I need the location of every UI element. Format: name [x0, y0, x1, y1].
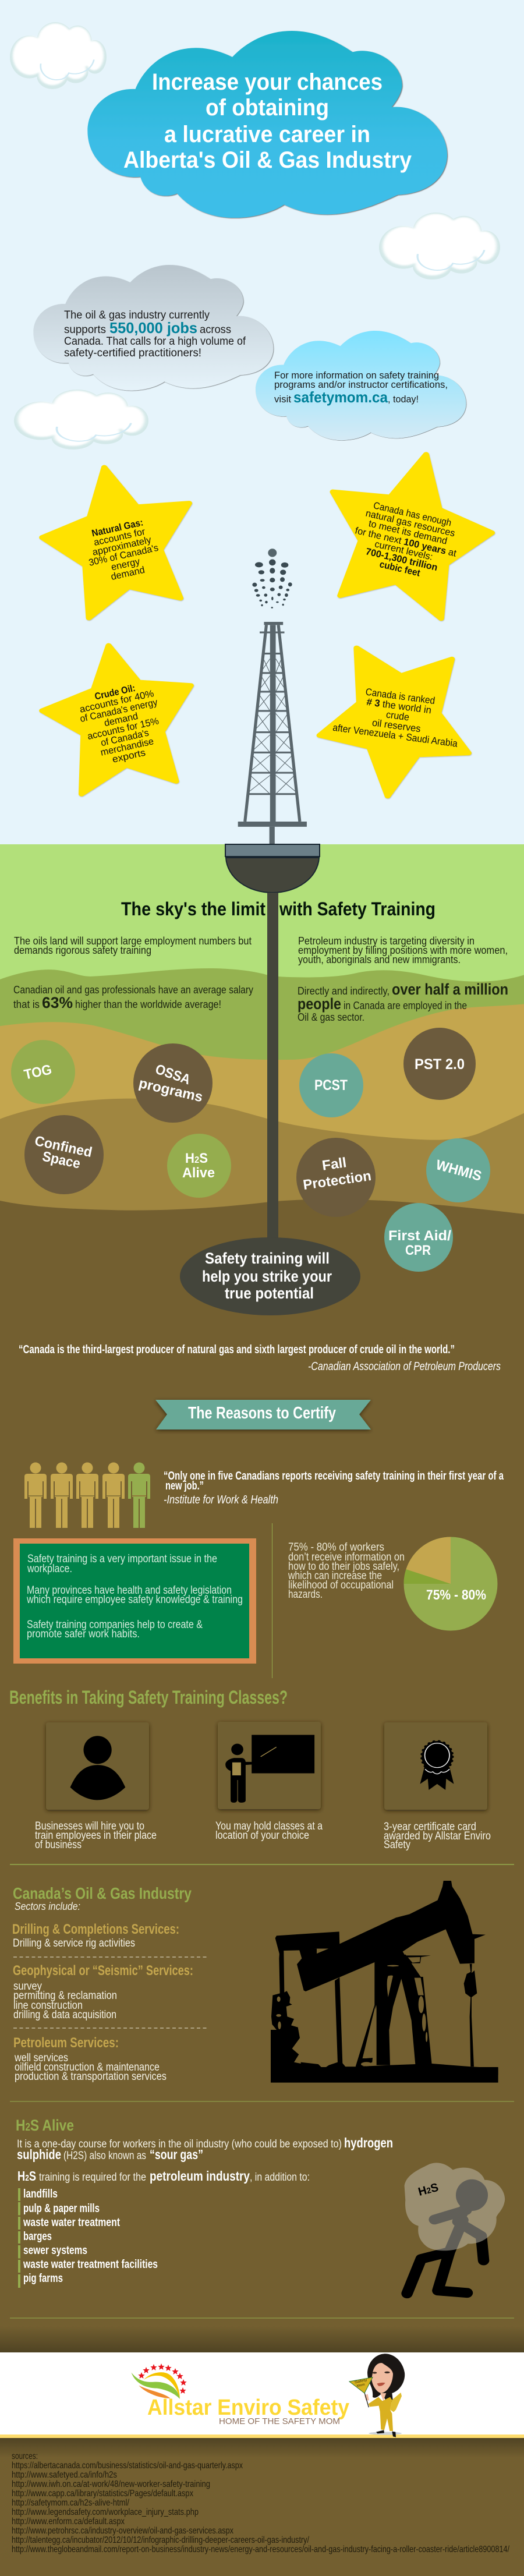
more information text: programs and/or instructor certifications, [274, 379, 448, 390]
natural gas text [82, 515, 164, 586]
badge: PST 2.0 [403, 1028, 476, 1100]
pie chart: 75-80 percent [403, 1537, 497, 1630]
sector: geophysical: permitting & reclamation [13, 1990, 117, 2002]
ground layers [0, 844, 524, 1311]
natural gas text: 30% of Canada's [88, 543, 160, 568]
text: employment numbers: demands rigorous safety training [14, 944, 151, 956]
heading: Canada's Oil & Gas Industry: Canada’s Oil & Gas Industry [13, 1884, 192, 1902]
badge: Confined Space [24, 1115, 104, 1194]
text: 63% salary: Canadian oil and gas professionals have an average salary [13, 984, 253, 996]
blue cloud: safetymom.ca [256, 331, 466, 440]
text: diversity: Petroleum industry is targeting diversity in [298, 935, 475, 947]
benefit text: location: You may hold classes at a [215, 1820, 323, 1832]
benefit text: hire you: train employees in their place [35, 1830, 157, 1842]
quote: one in five: -Institute for Work & Health [164, 1494, 278, 1506]
text: 63% salary: higher than the worldwide average! [75, 999, 221, 1010]
ranked text: crude [385, 709, 410, 723]
quote: Canadian Association of Petroleum Producers [19, 1343, 501, 1373]
pie chart: 75-80 percent: 75% - 80% [426, 1587, 486, 1603]
benefit text: hire you [35, 1820, 157, 1851]
100 years text [348, 497, 464, 586]
text: 75-80 percent of workers: likelihood of occupational [288, 1579, 394, 1591]
pictogram: one in five people [24, 1463, 150, 1528]
benefit text: certificate: awarded by Allstar Enviro [384, 1830, 491, 1842]
sources list: sources: [12, 2451, 38, 2461]
icon: award ribbon [420, 1741, 454, 1790]
badge: First Aid / CPR: CPR [405, 1243, 431, 1258]
quote: one in five [164, 1470, 504, 1506]
jobs text: supports [64, 324, 106, 336]
benefit card: hold classes [218, 1722, 321, 1809]
logo banner: Mom [356, 2383, 365, 2388]
sources list: http://talentegg.ca/incubator/2012/10/12/infographic-drilling-deeper-careers-oil-gas-industry/ [12, 2535, 309, 2545]
text: half a million people: Directly and indirectly, [298, 985, 390, 997]
list: H2S training industries [18, 2188, 158, 2288]
badge: First Aid / CPR: First Aid/ [388, 1228, 451, 1244]
ranked text: after Venezuela + Saudi Arabia [332, 722, 458, 749]
section heading: sky's the limit: The sky's the limit [121, 898, 265, 919]
text: 75-80 percent of workers [288, 1541, 405, 1601]
quote: one in five: new job.” [165, 1480, 204, 1492]
badge: Fall Protection [296, 1138, 376, 1217]
list: H2S training industries: pig farms [23, 2272, 63, 2285]
icon: gushing oil drops [252, 549, 292, 608]
text: 63% salary: 63% [42, 994, 73, 1011]
sources list: http://www.petrohrsc.ca/industry-overview/oil-and-gas-services.aspx [12, 2526, 233, 2536]
sector: geophysical: Geophysical or “Seismic” Services: [13, 1963, 193, 1979]
benefit text: location [215, 1820, 323, 1842]
chalkboard text: Safety training is a very important issue in the [27, 1553, 217, 1565]
sector: geophysical [13, 1963, 193, 2021]
benefit text: location: location of your choice [215, 1830, 309, 1842]
100 years text: current levels: [374, 539, 434, 562]
star: natural gas [42, 468, 189, 618]
list: H2S training industries: pulp & paper mills [23, 2202, 100, 2215]
text: diversity: youth, aboriginals and new immigrants. [298, 954, 461, 965]
jobs text: 550,000 jobs [109, 319, 197, 337]
crude oil text: exports [111, 748, 147, 765]
text: 75-80 percent of workers: how to do their jobs safely, [288, 1561, 399, 1573]
100 years text: to meet its demand [367, 518, 448, 547]
crude oil text: accounts for 40% [79, 688, 155, 715]
badge: TOG: TOG [23, 1061, 53, 1083]
sector: petroleum: oilfield construction & maintenance [15, 2061, 160, 2073]
badge: WHMIS: WHMIS [434, 1157, 483, 1184]
badge: Fall Protection: Protection [302, 1168, 372, 1193]
sources list: http://www.capp.ca/library/statistics/Pages/default.aspx [12, 2489, 193, 2499]
ranked text [332, 682, 463, 749]
ribbon: The Reasons to Certify [155, 1400, 371, 1429]
badge: First Aid / CPR [384, 1203, 453, 1272]
100 years text: cubic feet [378, 559, 422, 579]
strike your potential oval [180, 1237, 360, 1315]
star: 100 years of natural gas [333, 454, 492, 618]
strike your potential oval: Safety training will [205, 1250, 330, 1267]
decorative white cloud right [379, 213, 500, 279]
text: half a million people [298, 981, 508, 1023]
sector: geophysical: line construction [13, 2000, 83, 2012]
100 years text: 700-1,300 trillion [364, 546, 438, 573]
natural gas text: accounts for [93, 526, 147, 548]
jobs text: across [200, 324, 231, 336]
badge: Fall Protection: Fall [321, 1155, 348, 1174]
logo banner: Safety [354, 2379, 367, 2384]
logo banner [0, 2352, 524, 2438]
text: diversity [298, 935, 508, 965]
lower background [0, 1310, 524, 2576]
logo wordmark: Allstar Enviro Safety [147, 2395, 349, 2420]
text: H2S description: (H2S) also known as [63, 2150, 146, 2162]
text: half a million people: people [298, 995, 341, 1013]
title text: a lucrative career in [164, 122, 370, 147]
more information text: , today! [388, 394, 419, 405]
icon: figure overcome by H2S gas cloud: H2S [417, 2181, 440, 2199]
ranked text: Canada is ranked [365, 687, 436, 706]
sector: petroleum [13, 2035, 167, 2083]
benefit text: hire you: of business [35, 1839, 82, 1851]
strike your potential oval: true potential [225, 1285, 314, 1302]
jobs text [64, 309, 246, 359]
crude oil text: merchandise [100, 736, 155, 758]
badge: H2S Alive: Alive [182, 1165, 215, 1181]
sources list [12, 2451, 509, 2554]
sector: drilling and completions: Drilling & service rig activities [13, 1937, 135, 1949]
text: half a million people: in Canada are employed in the [344, 1000, 467, 1011]
logo mark [132, 2363, 187, 2399]
sources list: http://www.iwh.on.ca/at-work/48/new-worker-safety-training [12, 2479, 210, 2489]
heading: H2S Alive: H2S Alive [16, 2117, 74, 2134]
text: 75-80 percent of workers: hazards. [288, 1588, 323, 1601]
ranked text: # 3 the world in [366, 696, 432, 716]
benefit card: certificate [384, 1722, 487, 1810]
natural gas text: demand [110, 565, 146, 582]
crude oil text: accounts for 15% [86, 716, 160, 742]
text: H2S description: , in addition to: [250, 2171, 310, 2184]
badge: WHMIS [426, 1138, 490, 1202]
title text [123, 69, 412, 173]
chalkboard text: which require employee safety knowledge & training [26, 1594, 243, 1606]
text: H2S description [17, 2135, 393, 2184]
sources list: http://www.safetyed.ca/info/h2s [12, 2470, 117, 2480]
text: employment numbers [14, 935, 252, 956]
icon: figure overcome by H2S gas cloud [405, 2163, 505, 2294]
crude oil text: Crude Oil: [94, 683, 136, 702]
chalkboard text: workplace. [27, 1563, 72, 1575]
chalkboard text: Many provinces have health and safety legislation [27, 1584, 232, 1597]
sources list: http://www.enform.ca/default.aspx [12, 2517, 125, 2527]
text: employment numbers: The oils land will support large employment numbers but [14, 935, 252, 947]
100 years text: natural gas resources [364, 508, 456, 539]
more information text: visit [274, 394, 291, 405]
100 years text: for the next 100 years at [354, 525, 458, 559]
sources list: https://albertacanada.com/business/statistics/oil-and-gas-quarterly.aspx [12, 2461, 243, 2471]
chalkboard text: promote safer work habits. [27, 1628, 140, 1640]
sector: petroleum: Petroleum Services: [13, 2035, 119, 2051]
more information text: safetymom.ca [293, 388, 388, 406]
sector: drilling and completions: Drilling & Completions Services: [12, 1922, 179, 1937]
text: H2S description: training is required for the [39, 2171, 146, 2184]
chalkboard text [26, 1553, 243, 1640]
text: 75-80 percent of workers: 75% - 80% of workers [288, 1541, 384, 1554]
title text: of obtaining [206, 95, 329, 121]
badge: H2S Alive [167, 1134, 231, 1198]
badge: Confined Space: Space [41, 1148, 82, 1172]
sector: drilling and completions [12, 1922, 179, 1949]
benefit text: hire you: Businesses will hire you to [35, 1820, 144, 1832]
sector: petroleum: production & transportation services [15, 2071, 167, 2083]
100 years text: Canada has enough [373, 500, 452, 529]
star: crude oil [42, 646, 191, 794]
chalkboard panel [13, 1538, 256, 1664]
section heading: sky's the limit: with Safety Training [279, 898, 436, 919]
list: H2S training industries: waste water treatment facilities [23, 2258, 158, 2271]
strike your potential oval: help you strike your [202, 1268, 332, 1285]
heading: Canada's Oil & Gas Industry: Sectors include: [15, 1901, 80, 1912]
decorative white cloud lower left [14, 390, 148, 450]
crude oil text: of Canada's energy [79, 697, 159, 724]
icon: person [70, 1736, 125, 1800]
text: 75-80 percent of workers: don’t receive information on [288, 1551, 405, 1563]
natural gas text: approximately [91, 535, 153, 558]
sector: petroleum: well services [14, 2052, 68, 2064]
sources list: http://www.legendsafety.com/workplace_injury_stats.php [12, 2507, 199, 2517]
icon: teacher at board [225, 1735, 314, 1803]
mascot: safety mom [349, 2354, 405, 2437]
derrick cap and pipe [225, 844, 320, 1242]
star: ranked number 3 [320, 648, 469, 796]
badge: H2S Alive: H2S [185, 1151, 208, 1166]
jobs text: safety-certified practitioners! [64, 347, 201, 359]
benefit text: certificate: 3-year certificate card [384, 1821, 476, 1833]
chalkboard text: Safety training companies help to create & [27, 1619, 203, 1631]
ribbon: The Reasons to Certify: The Reasons to Certify [188, 1404, 336, 1423]
text: H2S description: sulphide [17, 2147, 61, 2162]
more information text [274, 370, 448, 406]
icon: pumpjack silhouette [271, 1881, 498, 2083]
title cloud [87, 31, 447, 218]
text: diversity: employment by filling positions with more women, [298, 944, 508, 956]
text: H2S description: “sour gas” [150, 2147, 203, 2162]
list: H2S training industries: barges [23, 2230, 52, 2243]
text: H2S description: petroleum industry [150, 2168, 250, 2184]
badge: OSSA programs [133, 1043, 213, 1123]
text: half a million people: over half a million [392, 981, 508, 998]
heading: Canada's Oil & Gas Industry [13, 1884, 192, 1912]
more information text: For more information on safety training [274, 370, 439, 381]
badge: PST 2.0: PST 2.0 [415, 1056, 465, 1073]
list: H2S training industries: sewer systems [23, 2244, 87, 2257]
text: 63% salary: that is [13, 999, 40, 1010]
badge: OSSA programs: programs [137, 1075, 204, 1105]
jobs text: The oil & gas industry currently [64, 309, 210, 321]
oil derrick tower [238, 622, 307, 844]
benefit text: certificate: Safety [384, 1839, 410, 1851]
crude oil text: of Canada's [100, 728, 150, 748]
sector: geophysical: survey [13, 1980, 42, 1993]
badge: TOG [11, 1040, 75, 1104]
text: H2S description: It is a one-day course for workers in the oil industry (who could be exposed to) [17, 2138, 342, 2150]
crude oil text: demand [103, 711, 139, 728]
crude oil text [75, 679, 169, 770]
grey cloud: 550,000 jobs [33, 265, 274, 391]
decorative white cloud top left [10, 22, 107, 89]
list: H2S training industries: waste water treatment [23, 2216, 120, 2229]
sources list: http://safetymom.ca/h2s-alive-html/ [12, 2498, 129, 2508]
list: H2S training industries: landfills [23, 2188, 58, 2200]
ranked text: oil reserves [371, 717, 422, 734]
logo banner: HOME OF THE SAFETY MOM [219, 2416, 340, 2426]
jobs text: Canada. That calls for a high volume of [64, 335, 246, 348]
badge: Confined Space: Confined [33, 1133, 94, 1160]
text: H2S description: H2S [17, 2168, 36, 2184]
title text: Alberta's Oil & Gas Industry [123, 147, 412, 173]
text: 75-80 percent of workers: which can increase the [288, 1570, 382, 1582]
heading: benefits: Benefits in Taking Safety Training Classes? [9, 1687, 288, 1708]
text: H2S description: hydrogen [344, 2135, 393, 2150]
sector: geophysical: drilling & data acquisition [13, 2009, 116, 2021]
natural gas text: Natural Gas: [91, 517, 144, 539]
benefit text: certificate [384, 1821, 491, 1851]
text: 63% salary [13, 984, 253, 1011]
text: half a million people: Oil & gas sector. [298, 1011, 364, 1023]
benefit card: trainer for business [46, 1722, 149, 1810]
sky background [0, 0, 524, 844]
badge: PCST [299, 1053, 363, 1117]
natural gas text: energy [110, 556, 141, 573]
badge: PCST: PCST [314, 1077, 348, 1094]
badge: OSSA programs: OSSA [153, 1061, 193, 1088]
section heading: sky's the limit [121, 898, 436, 919]
title text: Increase your chances [152, 69, 383, 95]
